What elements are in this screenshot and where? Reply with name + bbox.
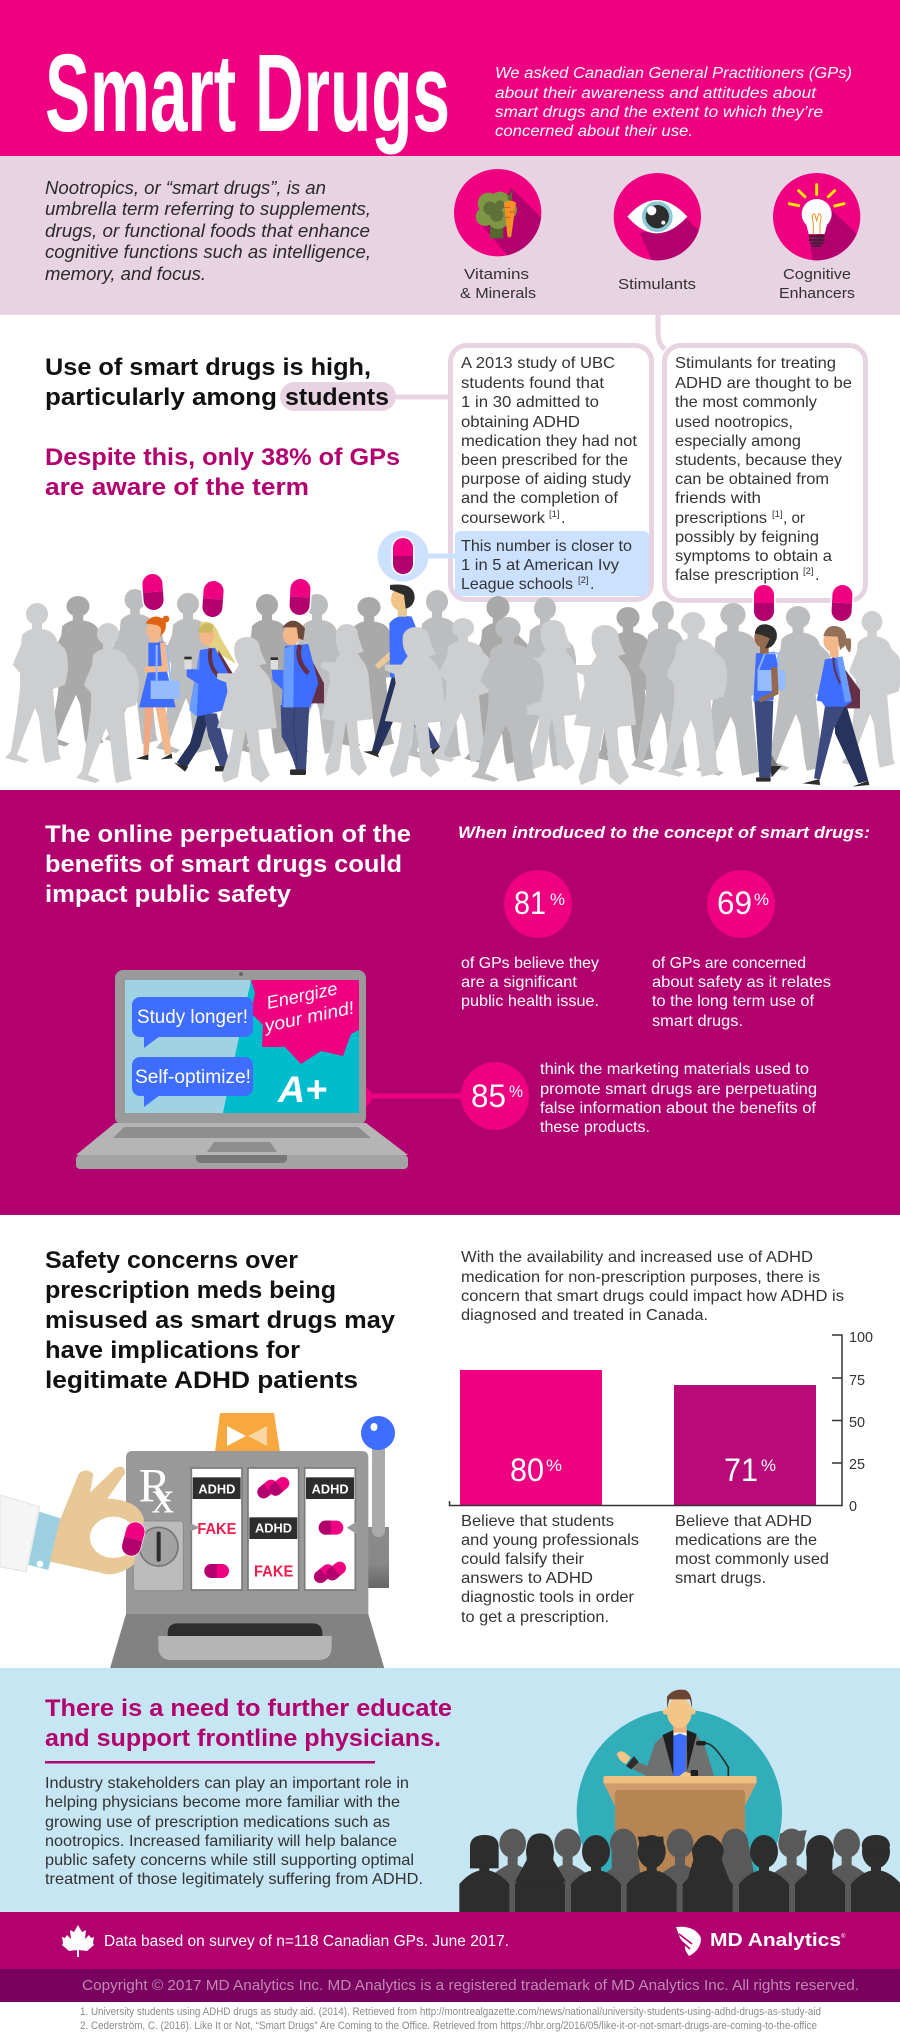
foreground silhouettes [217, 627, 447, 783]
heading: GP awareness: Despite this, only 38% of GPs [45, 444, 400, 471]
audience [459, 1829, 900, 1912]
definition text: Nootropics, or “smart drugs”, is an [45, 177, 326, 198]
highlight: Ivy League [455, 531, 649, 596]
callout: stimulants: Stimulants for treating [675, 355, 836, 372]
heading: safety concerns: have implications for [45, 1337, 300, 1364]
label: stimulants: Stimulants [618, 276, 696, 293]
grade: A+: A+ [277, 1069, 327, 1110]
references: 2. Cederström, C. (2016). Like It or Not, “Smart Drugs” Are Coming to the Office. Retrieved from https://hbr.org/2016/05/like-it-or-not-smart-drugs-are-coming-to-the-office [80, 2020, 817, 2032]
student: blonde woman with coffee [174, 622, 236, 772]
bar chart: 100 [849, 1329, 873, 1346]
callout: stimulants: used nootropics, [675, 414, 793, 431]
heading: need to educate: There is a need to further educate [45, 1695, 452, 1722]
callout: stimulants: possibly by feigning [675, 529, 819, 546]
stat: 69%: about safety as it relates [652, 974, 831, 991]
speech bubble: self-optimize: Self-optimize! [135, 1067, 251, 1088]
callout: UBC study: obtaining ADHD [461, 414, 580, 431]
caption: 80%: and young professionals [461, 1532, 639, 1549]
caption: 71%: medications are the [675, 1532, 817, 1549]
chart intro text: diagnosed and treated in Canada. [461, 1307, 708, 1324]
intro text: about their awareness and attitudes about [495, 85, 817, 102]
bar chart [450, 1329, 873, 1515]
bar chart: % [546, 1456, 562, 1475]
panel: public safety [0, 790, 900, 1215]
machine body [110, 1451, 384, 1668]
speaker [617, 1690, 728, 1776]
stat: 85%: 85 [471, 1078, 506, 1114]
stat: 85%: false information about the benefits of [540, 1100, 817, 1117]
callout: stimulants: prescriptions [675, 510, 767, 527]
label: vitamins [460, 266, 536, 302]
intro text: We asked Canadian General Practitioners (GPs) [495, 65, 852, 82]
bar chart: 0 [849, 1498, 857, 1515]
reels: ADHD [198, 1482, 235, 1496]
label: cognitive enhancers [779, 266, 855, 302]
panel: footer [0, 1912, 900, 2032]
stat: 85%: think the marketing materials used to [540, 1061, 809, 1078]
label: cognitive enhancers: Enhancers [779, 285, 855, 302]
label: cognitive enhancers: Cognitive [783, 266, 851, 283]
stat: 85% [366, 1061, 817, 1136]
caption: 80%: could falsify their [461, 1551, 585, 1568]
bar chart: 50 [849, 1414, 865, 1431]
lever [361, 1416, 395, 1588]
ad burst: energize your mind [251, 978, 359, 1064]
icon: pill bubble [378, 530, 457, 582]
hand holding pill [0, 1467, 148, 1574]
heading: online perpetuation: benefits of smart drugs could [45, 851, 402, 878]
highlight: Ivy League: . [590, 576, 594, 593]
heading: safety concerns: misused as smart drugs may [45, 1307, 396, 1334]
speaker and audience illustration [459, 1690, 900, 1915]
panel: definition [0, 156, 900, 315]
student: woman with tote [136, 616, 180, 760]
logo: MD Analytics: MD Analytics [710, 1930, 841, 1950]
caption: 80%: answers to ADHD [461, 1570, 593, 1587]
panel: ADHD concerns [0, 1215, 900, 1668]
chart intro text [461, 1249, 844, 1324]
callout: stimulants: can be obtained from [675, 471, 829, 488]
callout: UBC study: been prescribed for the [461, 452, 628, 469]
heading: GP awareness [45, 444, 400, 501]
slot machine illustration [0, 1413, 395, 1668]
icon: maple leaf [62, 1925, 94, 1957]
caption: 71%: smart drugs. [675, 1570, 766, 1587]
caption: 71% [675, 1513, 829, 1587]
icon: light bulb [773, 173, 860, 260]
heading: use of smart drugs: Use of smart drugs is high, [45, 354, 371, 381]
icon: vitamins [454, 169, 542, 256]
body text: Industry stakeholders can play an important role in [45, 1775, 409, 1792]
definition text: memory, and focus. [45, 263, 206, 284]
laptop illustration [76, 970, 408, 1169]
callout: UBC study: . [561, 510, 565, 527]
callout: UBC study: 1 in 30 admitted to [461, 394, 599, 411]
callout: stimulants: false prescription [675, 567, 799, 584]
copyright bar: Copyright © 2017 MD Analytics Inc. MD Analytics is a registered trademark of MD Analytics Inc. All rights reserved. [82, 1977, 859, 1994]
panel: usage [5, 315, 900, 787]
bar chart: 71 [724, 1452, 758, 1488]
body text: public safety concerns while still supporting optimal [45, 1852, 414, 1869]
references [80, 2006, 821, 2032]
heading: need to educate: and support frontline physicians. [45, 1725, 441, 1752]
callout: stimulants: the most commonly [675, 394, 817, 411]
caption: 71%: Believe that ADHD [675, 1513, 812, 1530]
bar chart: 75 [849, 1372, 865, 1389]
chart intro text: concern that smart drugs could impact how ADHD is [461, 1288, 844, 1305]
crowd of students [5, 573, 900, 787]
callout: stimulants [664, 346, 866, 600]
speech bubble: study longer: Study longer! [137, 1007, 248, 1028]
panel: header [0, 0, 900, 156]
callout: UBC study: coursework [461, 510, 546, 527]
heading: safety concerns: Safety concerns over [45, 1247, 298, 1274]
callout: stimulants: ADHD are thought to be [675, 375, 852, 392]
caption: 80%: Believe that students [461, 1513, 614, 1530]
label: vitamins: Vitamins [464, 266, 529, 283]
callout: stimulants: , or [783, 510, 806, 527]
heading: GP awareness: are aware of the term [45, 474, 309, 501]
Rx symbol: R [139, 1460, 171, 1513]
reels: FAKE [197, 1521, 236, 1538]
stat: 85%: these products. [540, 1119, 650, 1136]
heading: safety concerns: prescription meds being [45, 1277, 336, 1304]
connector from stimulants [658, 315, 665, 349]
reels: FAKE [254, 1564, 293, 1581]
lamp [215, 1413, 280, 1452]
body text: treatment of those legitimately suffering from ADHD. [45, 1871, 423, 1888]
stat: 69%: 69 [717, 885, 752, 921]
callout: stimulants: [1] [772, 509, 783, 520]
student: man with backpack [271, 621, 324, 775]
heading: safety concerns: legitimate ADHD patients [45, 1367, 358, 1394]
callout: stimulants: especially among [675, 433, 801, 450]
heading: use of smart drugs: particularly among [45, 384, 277, 411]
highlight: Ivy League: League schools [461, 576, 573, 593]
student: woman with backpack [803, 626, 869, 787]
caption: 80%: to get a prescription. [461, 1609, 609, 1626]
logo: MD Analytics: ® [841, 1933, 846, 1940]
stat: 81%: % [550, 890, 565, 909]
body text [45, 1775, 423, 1888]
callout: stimulants: students, because they [675, 452, 842, 469]
callout: UBC study: students found that [461, 375, 605, 392]
podium [603, 1776, 757, 1913]
heading: online perpetuation [45, 821, 411, 908]
speech bubble: self-optimize [132, 1057, 253, 1107]
callout: UBC study [450, 346, 652, 600]
definition text: drugs, or functional foods that enhance [45, 220, 370, 241]
highlight: Ivy League: 1 in 5 at American Ivy [461, 557, 619, 574]
bar chart: 80 [510, 1452, 544, 1488]
stat: 69%: smart drugs. [652, 1013, 743, 1030]
stat: 69%: of GPs are concerned [652, 955, 806, 972]
callout: UBC study: medication they had not [461, 433, 638, 450]
caption: 80%: diagnostic tools in order [461, 1589, 635, 1606]
icon: stimulants eye [614, 173, 701, 260]
stat: 69% [652, 870, 831, 1030]
logo: MD Analytics [676, 1927, 846, 1956]
bar chart: % [761, 1456, 776, 1475]
reels [185, 1468, 357, 1590]
callout: stimulants: . [815, 567, 819, 584]
heading: online perpetuation: The online perpetuation of the [45, 821, 411, 848]
heading: use of smart drugs: students [285, 384, 389, 411]
bar chart: 25 [849, 1456, 865, 1473]
callout: stimulants: symptoms to obtain a [675, 548, 832, 565]
callout: UBC study: and the completion of [461, 490, 619, 507]
intro text: smart drugs and the extent to which they’re [495, 104, 823, 121]
definition text [45, 177, 371, 284]
callout: stimulants: friends with [675, 490, 761, 507]
callout: UBC study: purpose of aiding study [461, 471, 631, 488]
heading: safety concerns [45, 1247, 396, 1394]
survey note: Data based on survey of n=118 Canadian GPs. June 2017. [104, 1933, 509, 1950]
background silhouettes [5, 589, 900, 785]
copyright bar [0, 1969, 900, 2002]
intro text [495, 65, 852, 140]
chart intro text: medication for non-prescription purposes, there is [461, 1269, 820, 1286]
chart intro text: With the availability and increased use of ADHD [461, 1249, 813, 1266]
panel: education [0, 1668, 900, 1915]
student: man with tote [753, 624, 785, 782]
callout: stimulants: [2] [803, 566, 814, 577]
stat: 85%: promote smart drugs are perpetuating [540, 1081, 817, 1098]
student: tall man [363, 584, 440, 758]
body text: growing use of prescription medications such as [45, 1814, 390, 1831]
caption: 80% [461, 1513, 639, 1626]
intro text: concerned about their use. [495, 123, 693, 140]
callout: UBC study: A 2013 study of UBC [461, 355, 615, 372]
stat: 81%: 81 [514, 885, 546, 921]
references: 1. University students using ADHD drugs as study aid. (2014). Retrieved from http://montrealgazette.com/news/national/university-students-using-adhd-drugs-as-study-aid [80, 2006, 821, 2018]
highlight: Ivy League: This number is closer to [461, 538, 632, 555]
stat: 81%: of GPs believe they [461, 955, 599, 972]
heading: online perpetuation: impact public safety [45, 881, 292, 908]
definition text: cognitive functions such as intelligence, [45, 241, 371, 262]
stat: 81%: are a significant [461, 974, 578, 991]
callout: UBC study: [1] [549, 509, 560, 520]
ad burst: energize your mind: Energize [265, 978, 339, 1013]
floating pills [142, 573, 853, 621]
stat: 81% [461, 870, 599, 1010]
heading: use of smart drugs [45, 354, 451, 411]
ad burst: energize your mind: your mind! [261, 997, 356, 1036]
label: vitamins: & Minerals [460, 285, 536, 302]
reels: ADHD [312, 1482, 349, 1496]
caption: 71%: most commonly used [675, 1551, 829, 1568]
speech bubble: study longer [132, 997, 253, 1048]
body text: helping physicians become more familiar with the [45, 1794, 400, 1811]
title: Smart Drugs [45, 32, 450, 155]
stat: 85%: % [509, 1082, 523, 1101]
stat: 81%: public health issue. [461, 993, 599, 1010]
subheading: When introduced to the concept of smart drugs: [458, 823, 870, 842]
body text: nootropics. Increased familiarity will help balance [45, 1833, 397, 1850]
stat: 69%: % [754, 890, 769, 909]
Rx symbol: x [152, 1472, 174, 1522]
definition text: umbrella term referring to supplements, [45, 198, 371, 219]
coin slot [133, 1521, 183, 1591]
highlight: Ivy League: [2] [578, 575, 589, 586]
stat: 69%: to the long term use of [652, 993, 815, 1010]
heading: need to educate [45, 1695, 452, 1752]
reels: ADHD [255, 1522, 292, 1536]
